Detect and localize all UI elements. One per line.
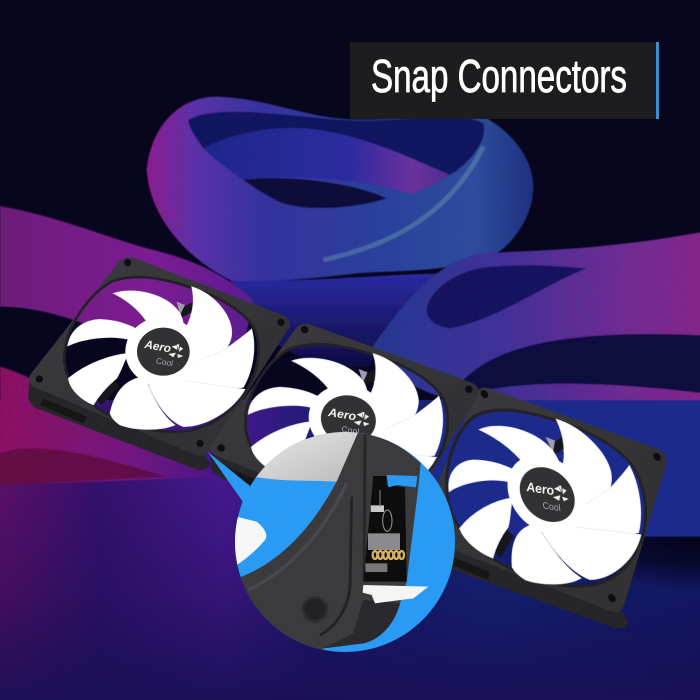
callout: magnified snap connector xyxy=(235,432,455,652)
electronics window xyxy=(363,476,407,582)
frame lower lobe xyxy=(323,600,400,648)
fan logo: centre xyxy=(325,405,362,436)
fan logo: centre: Cool xyxy=(341,424,360,436)
fan logo: left xyxy=(140,338,177,368)
ribbon: left magenta bands xyxy=(0,206,253,485)
fan: left xyxy=(28,257,290,470)
ribbon: upper looping fabric xyxy=(147,97,533,367)
circuit components xyxy=(365,490,400,572)
title panel xyxy=(350,42,659,119)
frame ridges xyxy=(248,435,365,635)
background: lower glow xyxy=(0,400,700,700)
blue notch xyxy=(387,475,417,487)
screw hole xyxy=(303,597,327,621)
white snap latch xyxy=(363,585,428,603)
magnified fan blade: left xyxy=(235,517,266,565)
fan logo: right: Cool xyxy=(542,500,561,513)
fan logo: left: Aero xyxy=(143,338,172,355)
fan logo: left: Cool xyxy=(155,356,174,368)
magnified fan blade: top xyxy=(256,432,364,482)
fan: right xyxy=(383,382,700,635)
fan logo: centre: Aero xyxy=(327,405,357,423)
magnified frame body xyxy=(240,432,421,650)
fan: centre xyxy=(201,323,489,540)
ribbon: right fabric xyxy=(370,227,700,537)
fan logo: right xyxy=(524,478,561,513)
fan logo: right: Aero xyxy=(524,478,555,498)
callout pointer xyxy=(208,452,250,502)
gold connector pins xyxy=(373,551,404,559)
